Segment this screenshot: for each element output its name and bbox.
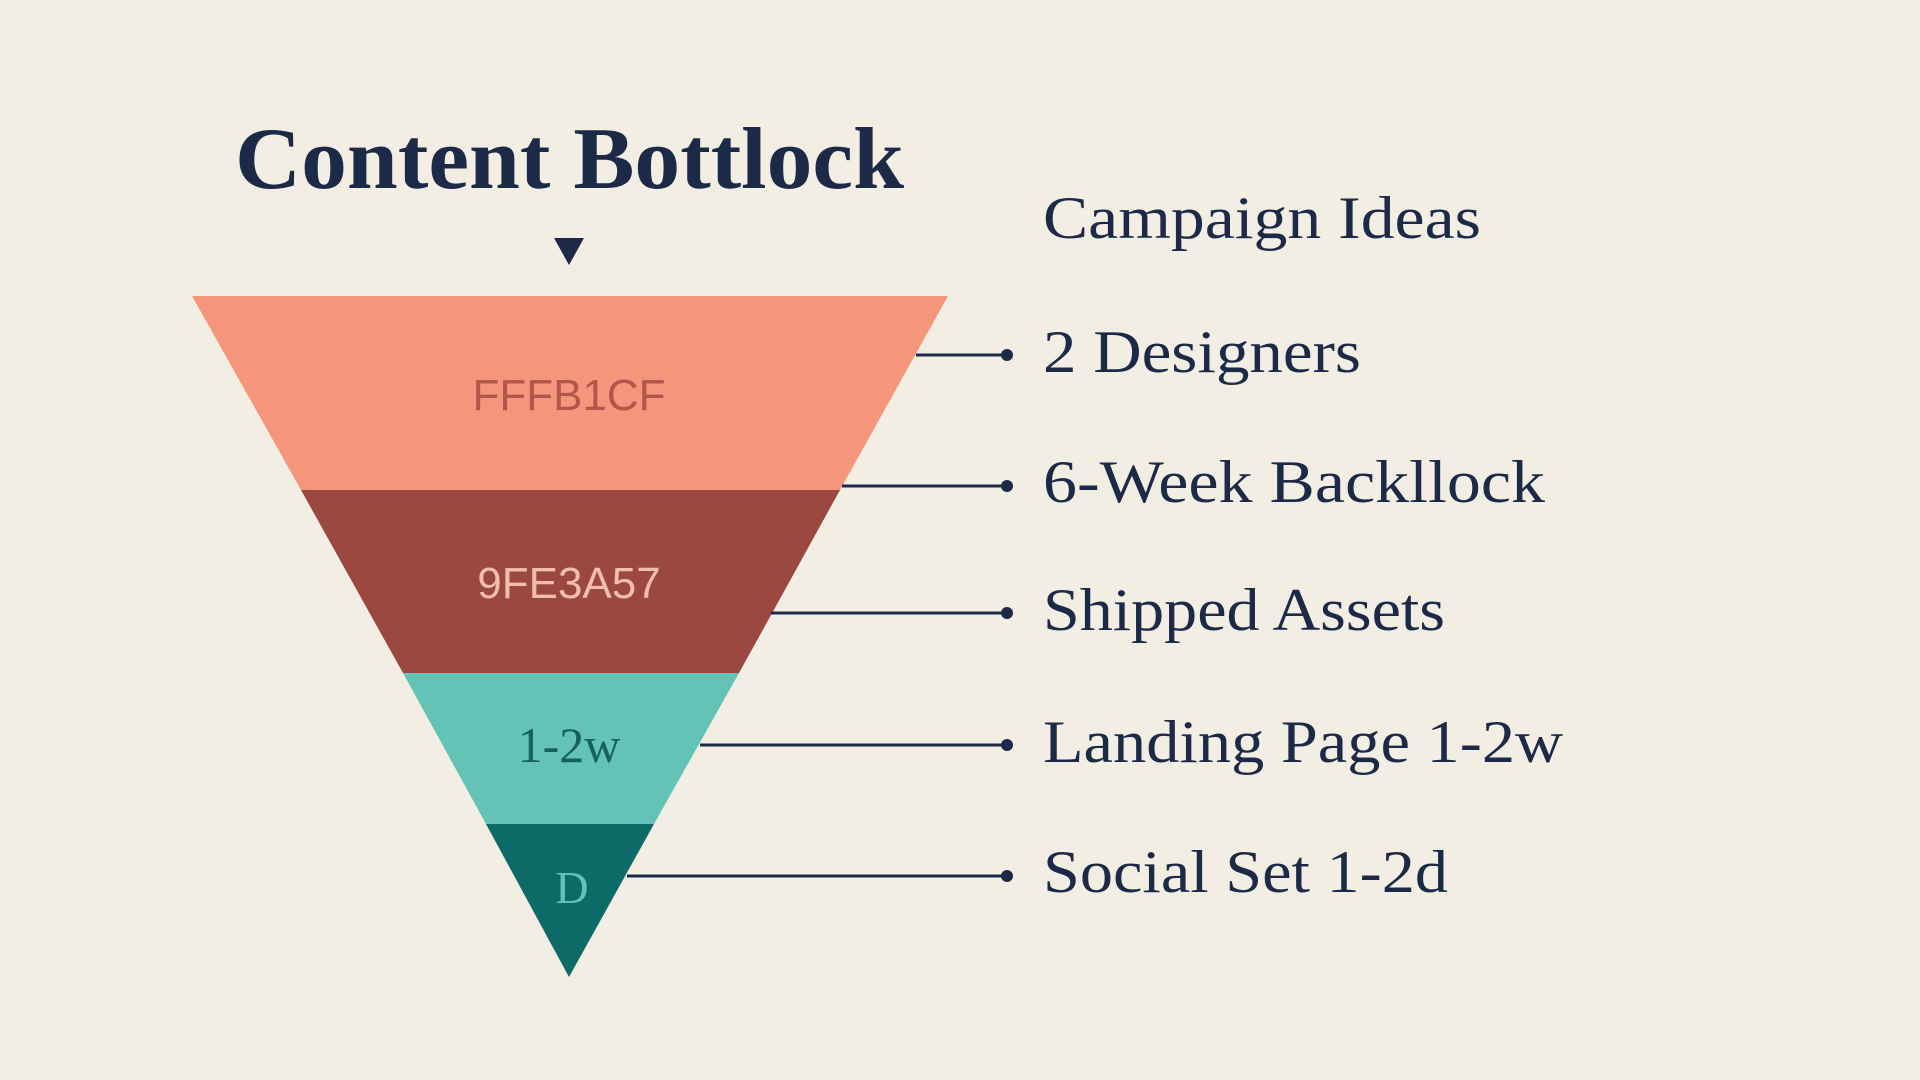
layer 3 bbox=[403, 673, 739, 824]
labels: 2 Designers bbox=[1043, 319, 1361, 385]
labels: 6-Week Backllock bbox=[1043, 449, 1545, 515]
labels: Social Set 1-2d bbox=[1043, 839, 1448, 905]
layer 2 bbox=[301, 490, 840, 673]
layer 4: D bbox=[555, 862, 589, 913]
layer 2: 9FE3A57 bbox=[477, 559, 661, 608]
funnel chart bbox=[192, 296, 948, 977]
icon: down arrow bbox=[554, 238, 584, 265]
layer 1: FFFB1CF bbox=[472, 371, 666, 420]
layer 1 bbox=[192, 296, 948, 490]
layer 4 bbox=[486, 824, 654, 977]
layer 3: 1-2w bbox=[518, 717, 620, 773]
labels: Shipped Assets bbox=[1043, 577, 1445, 643]
connectors bbox=[627, 349, 1013, 882]
title: Content Bottlock bbox=[235, 111, 904, 208]
labels bbox=[1043, 185, 1564, 905]
labels: Campaign Ideas bbox=[1043, 185, 1481, 251]
labels: Landing Page 1-2w bbox=[1043, 709, 1564, 775]
